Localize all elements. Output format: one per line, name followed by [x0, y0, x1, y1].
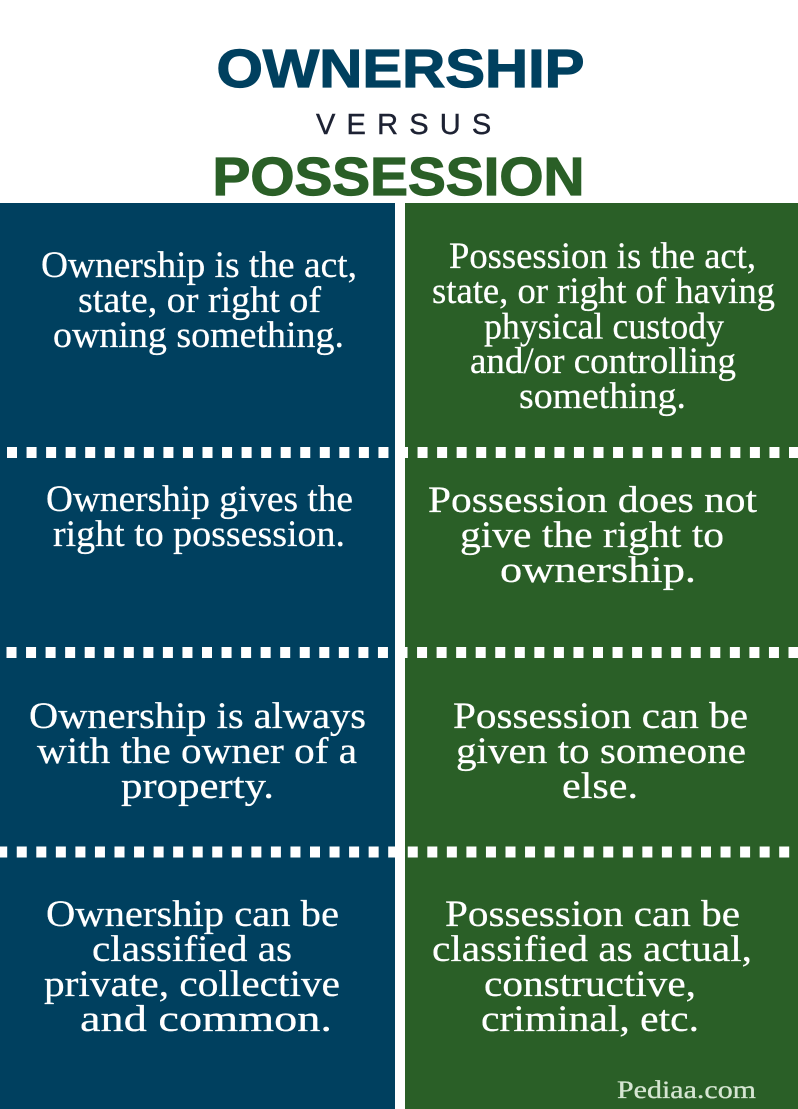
text: possession classes: constructive, [484, 964, 696, 1005]
text: ownership classes: Ownership can be [46, 894, 339, 935]
panel: possession column [405, 203, 798, 1109]
text: possession definition: physical custody [484, 306, 724, 348]
heading: versus: VERSUS [316, 109, 502, 141]
text: possession right: ownership. [500, 550, 696, 591]
text: possession right [428, 480, 758, 591]
text: ownership right: Ownership gives the [46, 479, 353, 520]
text: ownership classes: and common. [80, 999, 332, 1040]
heading: possession: POSSESSION [212, 147, 584, 207]
dotted divider 3 [0, 846, 798, 858]
text: possession holder: given to someone [456, 731, 746, 772]
text: ownership right: right to possession. [53, 514, 345, 555]
title [212, 39, 584, 207]
text: ownership holder: property. [121, 766, 274, 807]
text: ownership classes [44, 894, 340, 1040]
text: ownership holder: Ownership is always [29, 696, 366, 737]
text: possession classes: classified as actual, [432, 929, 752, 970]
text: possession definition: Possession is the act, [449, 236, 756, 277]
dotted divider 1 [7, 447, 798, 458]
text: possession holder [453, 696, 748, 807]
text: ownership definition [41, 245, 357, 356]
text: ownership definition: Ownership is the act, [41, 245, 357, 286]
text: possession definition: something. [519, 376, 686, 417]
text: possession holder: Possession can be [453, 696, 748, 737]
text: possession holder: else. [562, 766, 638, 807]
text: possession definition: state, or right of having [432, 271, 775, 312]
text: ownership classes: private, collective [44, 964, 340, 1005]
panel: ownership column [0, 203, 395, 1109]
text: ownership holder [29, 696, 366, 807]
text: possession definition [432, 236, 775, 417]
text: ownership classes: classified as [92, 929, 292, 970]
text: possession right: Possession does not [428, 480, 758, 521]
text: possession definition: and/or controlling [470, 341, 736, 382]
dotted divider 2 [6, 647, 798, 658]
text: possession right: give the right to [460, 515, 724, 556]
logo: Pediaa.com: Pediaa.com [617, 1077, 757, 1104]
text: possession classes [432, 894, 752, 1040]
text: ownership definition: owning something. [53, 315, 344, 356]
text: ownership definition: state, or right of [78, 280, 322, 321]
text: ownership right [46, 479, 353, 555]
heading: ownership: OWNERSHIP [216, 39, 584, 99]
text: possession classes: Possession can be [445, 894, 740, 935]
text: possession classes: criminal, etc. [481, 999, 699, 1040]
text: ownership holder: with the owner of a [37, 731, 357, 772]
